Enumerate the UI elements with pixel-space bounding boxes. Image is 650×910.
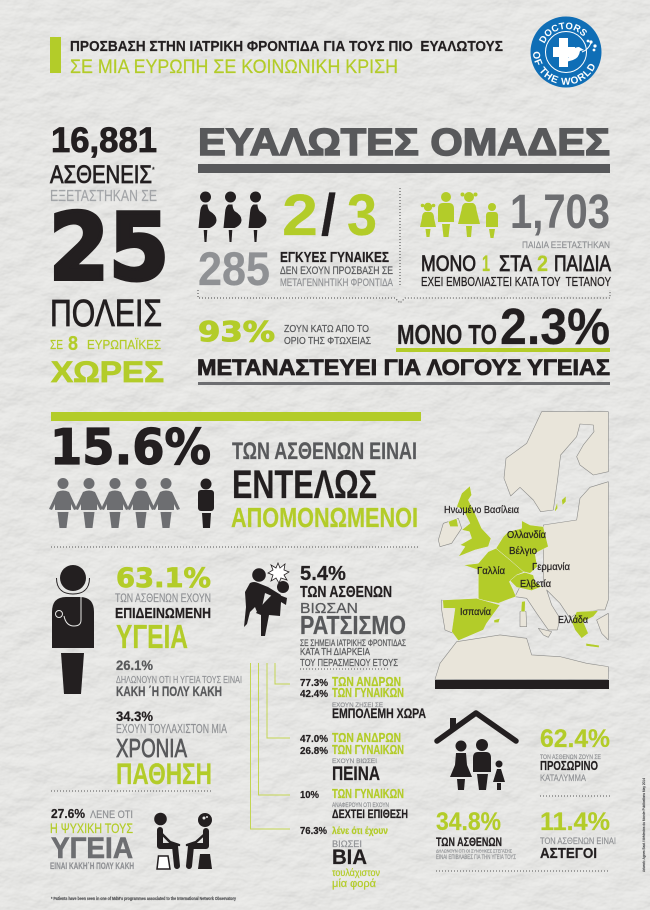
panel: mental health (50, 806, 134, 871)
panel: children (420, 186, 612, 289)
stat: harmful housing: 34.8% (436, 808, 501, 836)
panel: deteriorated health: 63.1% (116, 563, 211, 594)
stat: two thirds: 3 (347, 183, 377, 248)
panel: assault stats: 10% (300, 789, 320, 801)
text: 285 pregnant women: 285 (198, 242, 270, 295)
panel: assault stats: ΤΩΝ ΓΥΝΑΙΚΩΝ (332, 787, 404, 801)
panel: racism: ΡΑΤΣΙΣΜΟ (300, 610, 406, 640)
highlighted countries (443, 486, 599, 648)
text: one in two children: ΜΟΝΟ (421, 251, 476, 276)
text: completely isolated (231, 438, 418, 533)
footnote: * Patients have been seen in one of MdM's programmes associated to the International Network Observatory (51, 896, 236, 901)
icon: linked people and one isolated person (49, 478, 214, 528)
panel: racism: ΚΑΤΑ ΤΗ ΔΙΑΡΚΕΙΑ (300, 647, 370, 658)
text: completely isolated: ΑΠΟΜΟΝΩΜΕΝΟΙ (231, 502, 418, 533)
panel: isolated patients (49, 419, 418, 533)
panel: hunger stats: ΕΧΟΥΝ ΒΙΩΣΕΙ (332, 758, 377, 765)
text: 285 pregnant women: ΜΕΤΑΓΕΝΝΗΤΙΚΗ ΦΡΟΝΤΙΔΑ (280, 277, 393, 289)
header title: ΠΡΟΣΒΑΣΗ ΣΤΗΝ ΙΑΤΡΙΚΗ ΦΡΟΝΤΙΔΑ ΓΙΑ ΤΟΥΣ ΠΙΟ ΕΥΑΛΩΤΟΥΣ (70, 38, 503, 55)
panel: racism: ΒΙΩΣΑΝ (300, 600, 358, 617)
country labels: Ελλάδα (558, 614, 588, 626)
panel: racism (300, 563, 406, 669)
stat: only 2.3 percent migrate for health: ΜΕΤΑΝΑΣΤΕΥΕΙ ΓΙΑ ΛΟΓΟΥΣ ΥΓΕΙΑΣ (197, 355, 610, 380)
stat: only 2.3 percent migrate for health: ΜΟΝΟ ΤΟ (397, 319, 497, 350)
stat: two thirds: 2 (282, 183, 318, 248)
stat: only 2.3 percent migrate for health (197, 298, 610, 385)
panel: mental health: ΛΕΝΕ ΟΤΙ (90, 809, 133, 821)
panel: racism: ΤΩΝ ΑΣΘΕΝΩΝ (300, 584, 392, 601)
panel: deteriorated health: 26.1% (116, 657, 154, 673)
text: 285 pregnant women: ΔΕΝ ΕΧΟΥΝ ΠΡΟΣΒΑΣΗ ΣΕ (280, 265, 393, 277)
panel: hunger stats: 26.8% (300, 745, 329, 757)
text: one in two children: 2 (537, 251, 548, 276)
stat: children examined: 1,703 (510, 186, 610, 239)
left column: patient totals: 8 (68, 333, 78, 355)
country labels: Ελβετία (520, 578, 551, 590)
left column: patient totals (49, 121, 169, 389)
panel: violence stats (300, 825, 388, 890)
stat: only 2.3 percent migrate for health: 2.3% (500, 298, 610, 355)
panel: war-zone stats: ΤΩΝ ΑΝΔΡΩΝ (332, 675, 401, 689)
stat: harmful housing: ΔΗΛΩΝΟΥΝ ΟΤΙ ΟΙ ΣΥΝΘΗΚΕΣ ΣΤΕΓΑΣΗΣ (436, 848, 512, 854)
icon: family under a roof (437, 713, 516, 790)
panel: war-zone stats: 77.3% (300, 677, 329, 689)
panel: deteriorated health: 34.3% (116, 708, 154, 724)
panel: violence stats: μία φορά (332, 878, 377, 890)
panel: hunger stats: 47.0% (300, 733, 329, 745)
country labels: Βέλγιο (509, 545, 537, 557)
panel: deteriorated health: ΔΗΛΩΝΟΥΝ ΟΤΙ Η ΥΓΕΙΑ ΤΟΥΣ ΕΙΝΑΙ (116, 674, 242, 686)
panel: deteriorated health: ΚΑΚΗ ΄Η ΠΟΛΥ ΚΑΚΗ (116, 684, 222, 699)
text: 285 pregnant women (198, 242, 393, 295)
stat: temporary accommodation (540, 725, 610, 784)
icon: three pregnant women (198, 192, 266, 242)
country labels: Γερμανία (532, 561, 570, 573)
country labels (444, 504, 588, 626)
panel: mental health: ΥΓΕΙΑ (51, 832, 133, 865)
icon: doctor with stethoscope (52, 565, 94, 694)
vertical credit line: Artwork: Agnes Baxt / Médecins du Monde Publications May 2014 (641, 777, 646, 872)
map of Europe (435, 412, 609, 689)
panel: hunger stats: ΤΩΝ ΓΥΝΑΙΚΩΝ (332, 743, 404, 757)
panel: assault stats (300, 787, 408, 821)
logo: Doctors of the World (530, 16, 602, 88)
panel: war-zone stats (300, 675, 426, 721)
panel: mental health: 27.6% (51, 806, 85, 821)
land masses (435, 412, 608, 679)
stat: temporary accommodation: ΠΡΟΣΩΡΙΝΟ (540, 759, 598, 773)
panel: deteriorated health: ΤΩΝ ΑΣΘΕΝΩΝ ΕΧΟΥΝ (115, 591, 211, 605)
stat: 93 percent below poverty line: ΟΡΙΟ ΤΗΣ ΦΤΩΧΕΙΑΣ (284, 335, 371, 347)
stat: 93 percent below poverty line (198, 315, 371, 348)
left column: patient totals: 25 (49, 194, 169, 301)
panel: deteriorated health (115, 563, 242, 791)
panel: war-zone stats: ΤΩΝ ΓΥΝΑΙΚΩΝ (332, 686, 404, 700)
panel: racism: ΣΕ ΣΗΜΕΙΑ ΙΑΤΡΙΚΗΣ ΦΡΟΝΤΙΔΑΣ (300, 638, 406, 648)
panel: pregnant women (198, 183, 393, 295)
panel: violence stats: λένε ότι έχουν (332, 826, 388, 837)
left column: patient totals: ΠΟΛΕΙΣ (50, 293, 162, 335)
stat: temporary accommodation: ΚΑΤΑΛΥΜΜΑ (540, 773, 587, 784)
left column: patient totals: ΣΕ (50, 337, 63, 352)
panel: deteriorated health: ΕΠΙΔΕΙΝΩΜΕΝΗ (115, 606, 211, 622)
left column: patient totals: ΧΩΡΕΣ (51, 356, 164, 389)
panel: hunger stats: ΠΕΙΝΑ (332, 764, 380, 785)
stat: harmful housing: ΕΙΝΑΙ ΕΠΙΒΛΑΒΕΣ ΓΙΑ ΤΗΝ ΥΓΕΙΑ ΤΟΥΣ (436, 855, 516, 861)
panel: mental health: Η ΨΥΧΙΚΗ ΤΟΥΣ (50, 820, 133, 836)
header title (50, 37, 503, 78)
stat: homeless: ΑΣΤΕΓΟΙ (540, 845, 597, 862)
header title: ΣΕ ΜΙΑ ΕΥΡΩΠΗ ΣΕ ΚΟΙΝΩΝΙΚΗ ΚΡΙΣΗ (70, 56, 398, 78)
stat: children examined: ΠΑΙΔΙΑ ΕΞΕΤΑΣΤΗΚΑΝ (522, 240, 610, 251)
stat: harmful housing: ΤΩΝ ΑΣΘΕΝΩΝ (436, 835, 502, 849)
text: completely isolated: ΤΩΝ ΑΣΘΕΝΩΝ ΕΙΝΑΙ (232, 438, 417, 465)
text: one in two children: ΠΑΙΔΙΑ (554, 251, 611, 276)
stat: harmful housing (436, 808, 516, 861)
stat: temporary accommodation: 62.4% (540, 725, 610, 753)
left column: patient totals: ΕΥΡΩΠΑΪΚΕΣ (87, 337, 161, 352)
left column: patient totals: 16,881 (51, 121, 157, 160)
stat: homeless (540, 808, 616, 862)
stat: two thirds: / (321, 183, 336, 248)
panel: violence stats: ΒΙΑ (332, 846, 367, 869)
panel: war-zone stats: 42.4% (300, 688, 329, 700)
stat: temporary accommodation: ΤΟΝ ΑΣΘΕΝΩΝ ΖΟΥΝ ΣΕ (540, 754, 602, 761)
text: one in two children: 1 (482, 251, 490, 276)
panel: war-zone stats: ΕΧΟΥΝ ΖΗΣΕΙ ΣΕ (332, 702, 384, 709)
panel: racism: 5.4% (300, 563, 346, 585)
text: one in two children: ΣΤΑ (499, 251, 532, 276)
text: 285 pregnant women: ΕΓΚΥΕΣ ΓΥΝΑΙΚΕΣ (280, 249, 389, 266)
panel: racism: ΤΟΥ ΠΕΡΑΣΜΕΝΟΥ ΕΤΟΥΣ (300, 657, 398, 669)
panel: mental health: ΕΙΝΑΙ ΚΑΚΗ΄Η ΠΟΛΥ ΚΑΚΗ (50, 861, 134, 871)
icon: four children (420, 192, 498, 238)
panel: assault stats: ΑΝΑΦΕΡΟΥΝ ΟΤΙ ΕΧΟΥΝ (332, 803, 389, 809)
connector lines (250, 663, 290, 829)
panel: deteriorated health: ΧΡΟΝΙΑ (116, 733, 187, 763)
country labels: Ηνωμένο Βασίλεια (444, 504, 519, 516)
panel: violence stats: τουλάχιστον (332, 867, 380, 879)
left column: patient totals: * (152, 167, 155, 174)
panel: violence stats: ΒΙΩΣΕΙ (332, 839, 362, 850)
icon: two seated people talking (154, 813, 212, 869)
stat: homeless: ΤΟΝ ΑΣΘΕΝΩΝ ΕΙΝΑΙ (540, 836, 616, 847)
panel: hunger stats: ΤΩΝ ΑΝΔΡΩΝ (332, 731, 401, 745)
section divider bar (51, 412, 421, 421)
panel: violence stats: 76.3% (300, 825, 328, 837)
stat: 15.6 percent: 15.6% (50, 419, 211, 476)
stat: 93 percent below poverty line: ΖΟΥΝ ΚΑΤΩ ΑΠΟ ΤΟ (284, 323, 369, 335)
icon: person attacking another person (244, 563, 289, 636)
panel: hunger stats (300, 731, 404, 785)
stat: 93 percent below poverty line: 93% (198, 315, 275, 348)
panel: assault stats: ΔΕΧΤΕΙ ΕΠΙΘΕΣΗ (332, 807, 408, 821)
panel: deteriorated health: ΕΧΟΥΝ ΤΟΥΛΑΧΙΣΤΟΝ ΜΙΑ (116, 722, 227, 736)
left column: patient totals: ΑΣΘΕΝΕΙΣ (50, 161, 152, 189)
panel: deteriorated health: ΠΑΘΗΣΗ (116, 758, 212, 791)
panel: war-zone stats: ΕΜΠΟΛΕΜΗ ΧΩΡΑ (332, 706, 426, 721)
logo: Doctors of the World: DOCTORS (538, 22, 587, 44)
stat: two thirds (282, 183, 377, 248)
left column: patient totals: ΕΞΕΤΑΣΤΗΚΑΝ ΣΕ (50, 188, 157, 205)
country labels: Ολλανδία (507, 529, 546, 541)
text: one in two children (421, 251, 612, 289)
logo: Doctors of the World: OF THE WORLD (533, 52, 595, 85)
panel: deteriorated health: ΥΓΕΙΑ (116, 618, 188, 655)
country labels: Ισπανία (460, 606, 491, 618)
text: completely isolated: ΕΝΤΕΛΩΣ (232, 463, 377, 507)
heading: vulnerable groups: ΕΥΑΛΩΤΕΣ ΟΜΑΔΕΣ (198, 122, 610, 164)
stat: homeless: 11.4% (540, 808, 610, 836)
country labels: Γαλλία (477, 565, 505, 577)
